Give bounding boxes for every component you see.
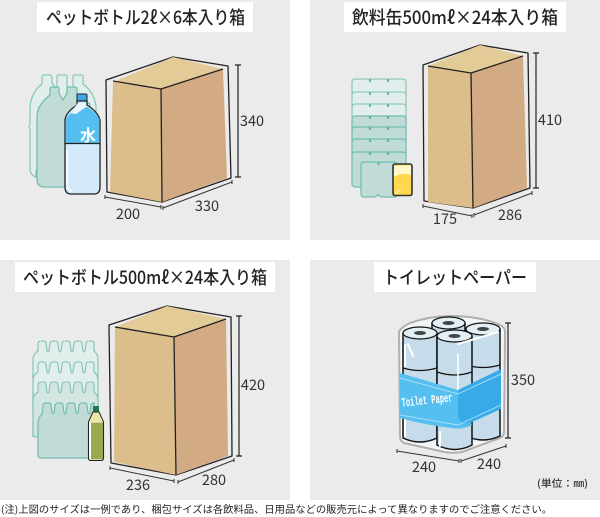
panel: PET bottle 2L case: [0, 0, 290, 240]
icon: beer can: [393, 164, 412, 196]
band: right face: [458, 369, 501, 423]
dimension: width 200: [105, 195, 161, 224]
panel: toilet paper: [310, 260, 600, 500]
dimension: height 410: 410: [538, 109, 562, 130]
cardboard box: [109, 306, 232, 475]
roll: front: [437, 330, 498, 450]
icon: water bottle: [65, 94, 100, 194]
dimension: depth 280: 280: [202, 469, 226, 490]
footnote: (注)上図のサイズは一例であり、梱包サイズは各飲料品、日用品などの販売元によって異なりますのでご注意ください。: [1, 501, 552, 516]
dimension: width 175: 175: [433, 208, 457, 229]
icon: stacked bottles: [33, 341, 98, 458]
dimension: width 240: 240: [412, 456, 436, 477]
heading: beverage can: 飲料缶500mℓ×24本入り箱: [352, 4, 558, 30]
icon: back bottles: [29, 75, 96, 187]
dimension: depth 286: 286: [498, 204, 522, 225]
heading: PET bottle 2L: ペットボトル2ℓ×6本入り箱: [46, 4, 245, 30]
dimension: depth 330: [163, 180, 232, 216]
dimension: height 340: [235, 65, 264, 177]
heading: PET bottle 500ml: ペットボトル500mℓ×24本入り箱: [23, 264, 267, 290]
heading: toilet paper: トイレットペーパー: [383, 264, 527, 290]
dimension: depth 330: 330: [195, 195, 219, 216]
dimension: width 175: [423, 204, 472, 229]
dimension: height 350: 350: [511, 369, 535, 390]
dimension: depth 286: [474, 191, 532, 225]
panel: PET bottle 500ml case: [0, 260, 290, 500]
icon: toilet paper pack: [399, 316, 505, 453]
dimension: height 350: [505, 323, 535, 438]
cardboard box: [423, 45, 530, 208]
unit note: (単位：㎜): [537, 475, 588, 490]
dimension: depth 240: [461, 444, 506, 474]
dimension: height 420: 420: [241, 374, 265, 395]
icon: water bottle: 水: [80, 122, 96, 146]
dimension: width 236: [110, 466, 174, 495]
dimension: width 240: [397, 449, 459, 477]
dimension: width 200: 200: [116, 203, 140, 224]
icon: green tea bottle: [88, 406, 104, 460]
dimension: depth 240: 240: [477, 453, 501, 474]
icon: stacked cans: [352, 79, 406, 197]
roll: left: [403, 327, 437, 442]
band label: Toilet Paper: [401, 391, 453, 411]
dimension: height 410: [533, 53, 562, 188]
roll: back: [432, 317, 465, 363]
band: left face: [400, 373, 472, 429]
panel: beverage can 500ml case: [310, 0, 600, 240]
roll: right: [466, 323, 500, 440]
band lines: [400, 374, 501, 425]
dimension: height 420: [236, 316, 265, 456]
dimension: depth 280: [178, 458, 234, 490]
dimension: height 340: 340: [240, 110, 264, 131]
cardboard box: [106, 57, 231, 202]
dimension: width 236: 236: [126, 474, 150, 495]
